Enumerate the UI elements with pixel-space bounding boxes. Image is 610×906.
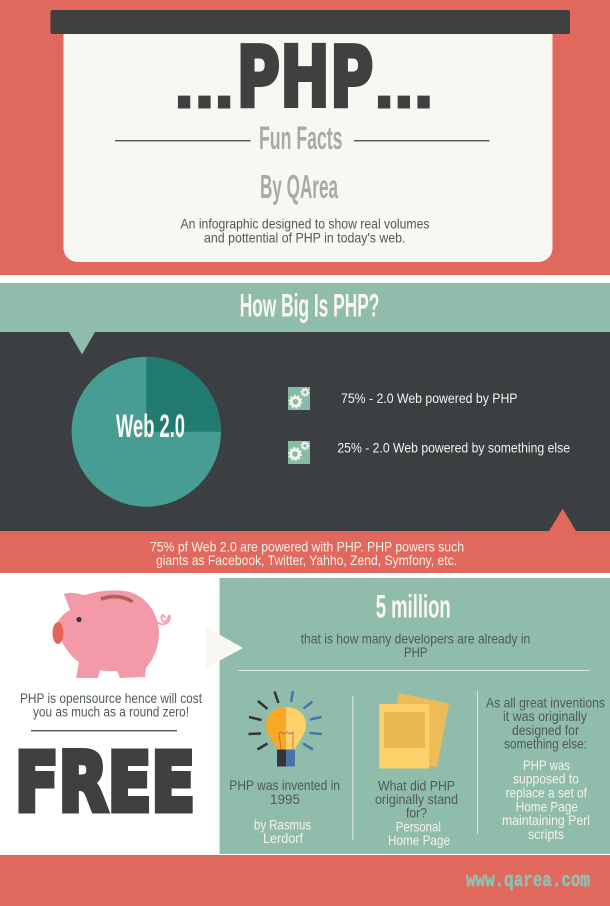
fact: original purpose: scripts — [528, 826, 564, 842]
fact: original name: Home Page — [388, 832, 450, 848]
fact: original purpose: Home Page — [516, 798, 578, 814]
intro text: and pottential of PHP in today's web. — [204, 230, 406, 246]
big number: 5 million — [376, 588, 451, 624]
developers text — [301, 631, 530, 660]
fact: invented: by Rasmus — [254, 816, 311, 832]
panel: header — [0, 0, 610, 275]
card — [64, 30, 552, 262]
panel: how big heading: How Big Is PHP? — [240, 288, 379, 324]
panel: how big chart — [0, 332, 610, 531]
intro text — [180, 216, 430, 246]
pie chart — [72, 357, 221, 507]
fact: original name — [375, 778, 458, 848]
pie chart: Web 2.0 — [116, 408, 185, 444]
panel: red summary: giants as Facebook, Twitter, Yahho, Zend, Symfony, etc. — [156, 552, 457, 568]
legend item 25%: 25% - 2.0 Web powered by something else — [337, 440, 570, 456]
free text block — [20, 690, 202, 720]
developers text: that is how many developers are already in — [301, 631, 530, 647]
byline: By QArea — [260, 168, 338, 205]
panel: red summary — [0, 509, 610, 573]
title: PHP — [236, 28, 374, 126]
developers text: PHP — [404, 644, 428, 660]
fact: invented: Lerdorf — [263, 830, 303, 846]
legend item 75% — [288, 387, 518, 410]
pointer — [69, 332, 95, 354]
fact: original purpose: maintaining Perl — [502, 812, 590, 828]
panel: red summary: 75% pf Web 2.0 are powered with PHP. PHP powers such — [150, 539, 464, 555]
free text block: PHP is opensource hence will cost — [20, 690, 202, 706]
fact: original name: Personal — [396, 819, 441, 835]
panel: footer — [0, 855, 610, 906]
title: ... — [173, 36, 235, 125]
title: ... — [373, 36, 435, 125]
fact: original name: What did PHP — [378, 778, 455, 794]
icon: piggy bank — [52, 590, 170, 678]
fact: original purpose: designed for — [512, 722, 579, 738]
intro text: An infographic designed to show real volumes — [180, 216, 430, 232]
panel: facts — [206, 578, 610, 854]
fact: invented: PHP was invented in — [229, 777, 340, 793]
legend item 25% — [288, 440, 570, 464]
fact: original purpose: PHP was — [523, 757, 570, 773]
fact: original purpose — [486, 695, 605, 842]
panel: free — [15, 590, 202, 831]
top bar — [50, 10, 570, 34]
free wordmark: FREE — [15, 737, 195, 831]
icon: light bulb — [248, 691, 322, 766]
subtitle: Fun Facts: Fun Facts — [259, 120, 342, 156]
panel: how big heading — [0, 283, 610, 332]
fact: original name: for? — [406, 805, 427, 821]
fact: original purpose: it was originally — [503, 708, 587, 724]
fact: invented — [229, 777, 340, 846]
legend item 75%: 75% - 2.0 Web powered by PHP — [341, 390, 518, 406]
fact: original purpose: supposed to — [513, 771, 579, 787]
fact: original purpose: something else: — [504, 736, 587, 752]
icon: photo sheets — [379, 693, 449, 768]
fact: invented: 1995 — [270, 791, 300, 807]
fact: original purpose: replace a set of — [506, 784, 587, 800]
fact: original name: originally stand — [375, 791, 458, 807]
arrow — [206, 627, 243, 668]
free text block: you as much as a round zero! — [33, 704, 189, 720]
